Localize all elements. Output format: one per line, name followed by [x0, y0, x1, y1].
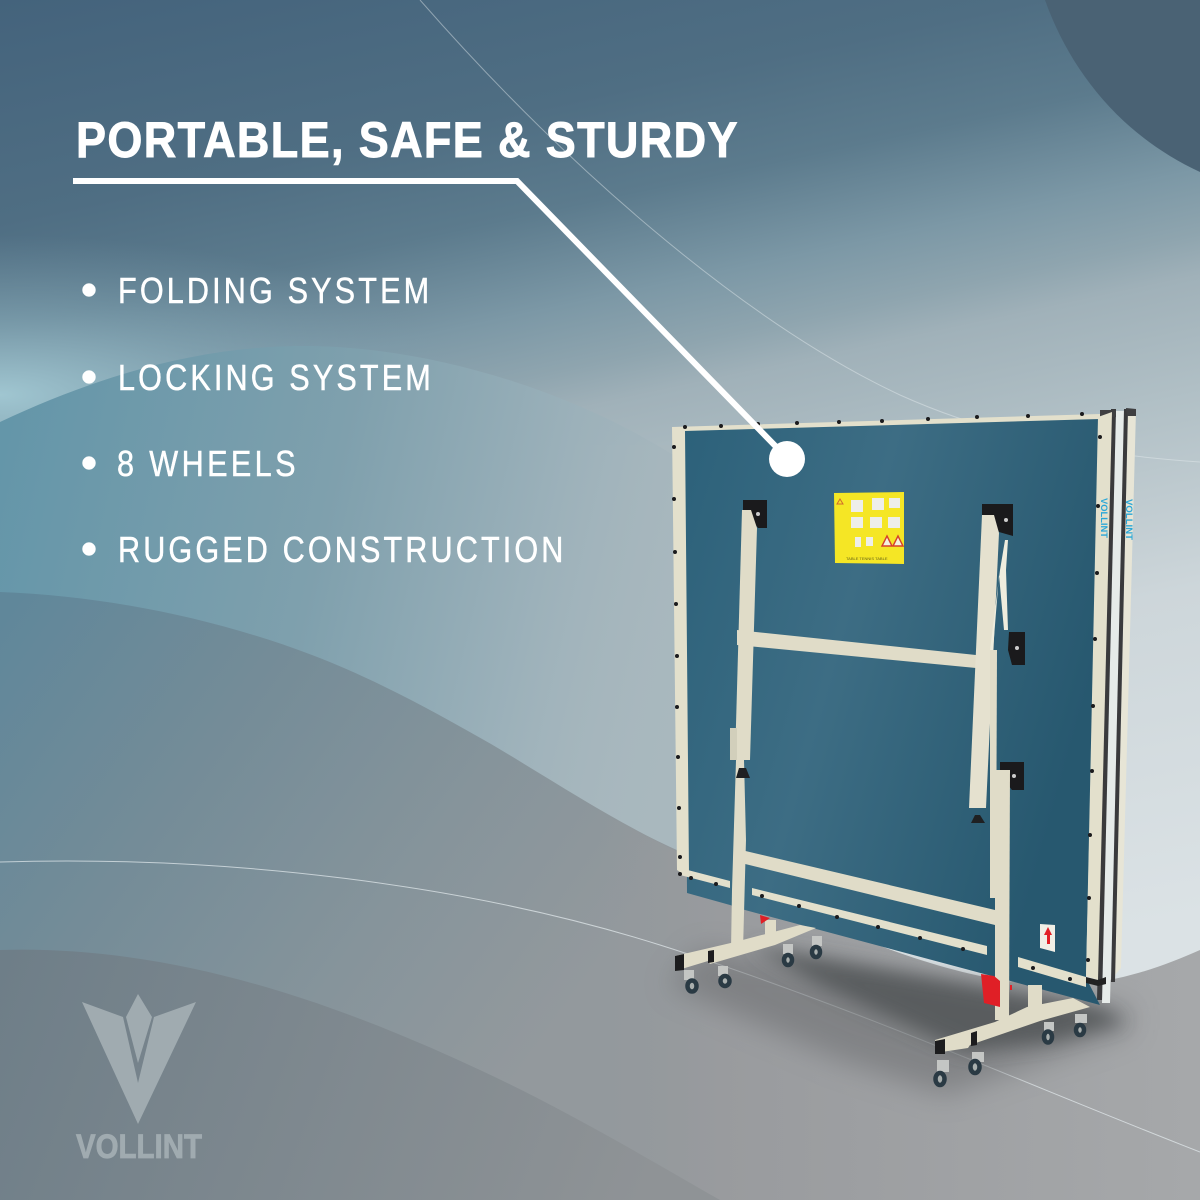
- safety instruction sticker: [834, 492, 904, 564]
- brand print on frame edges: VOLLINT: [1124, 499, 1134, 541]
- logo wordmark: VOLLINT: [76, 1128, 202, 1166]
- table top blue surface: [684, 418, 1100, 1005]
- frame corner and bottom dark edge: [1086, 977, 1106, 986]
- red locking levers: [760, 915, 1012, 1007]
- rear table halves seen edge-on: [1097, 408, 1136, 1003]
- caster wheels: [684, 936, 1087, 1085]
- folding legs and crossbars: [730, 510, 1042, 1020]
- logo mark: [82, 994, 196, 1124]
- safety instruction sticker: TABLE TENNIS TABLE: [846, 556, 888, 561]
- frame bolts: [674, 414, 1100, 979]
- leg foot pads: [736, 768, 985, 823]
- table frame edges: [672, 412, 1112, 987]
- logo: Vollint: [76, 994, 202, 1166]
- hinge brackets: [743, 500, 1025, 790]
- wheeled base frames: [675, 925, 1090, 1054]
- upward arrow label: [1040, 924, 1055, 952]
- callout leader line with dot: [73, 181, 805, 477]
- bullet list: [82, 272, 563, 571]
- title: PORTABLE, SAFE & STURDY: [76, 113, 738, 169]
- floor shadow under table: [668, 945, 1130, 1095]
- brand print on frame edges: [1099, 498, 1134, 541]
- bullet: 8 wheels: 8 WHEELS: [117, 445, 296, 485]
- bullet: rugged construction: RUGGED CONSTRUCTION: [118, 531, 563, 571]
- brand print on frame edges: VOLLINT: [1099, 498, 1109, 539]
- product: folded table tennis table on wheels: [672, 408, 1136, 1085]
- bullet: folding system: FOLDING SYSTEM: [118, 272, 429, 312]
- bullet: locking system: LOCKING SYSTEM: [118, 359, 431, 399]
